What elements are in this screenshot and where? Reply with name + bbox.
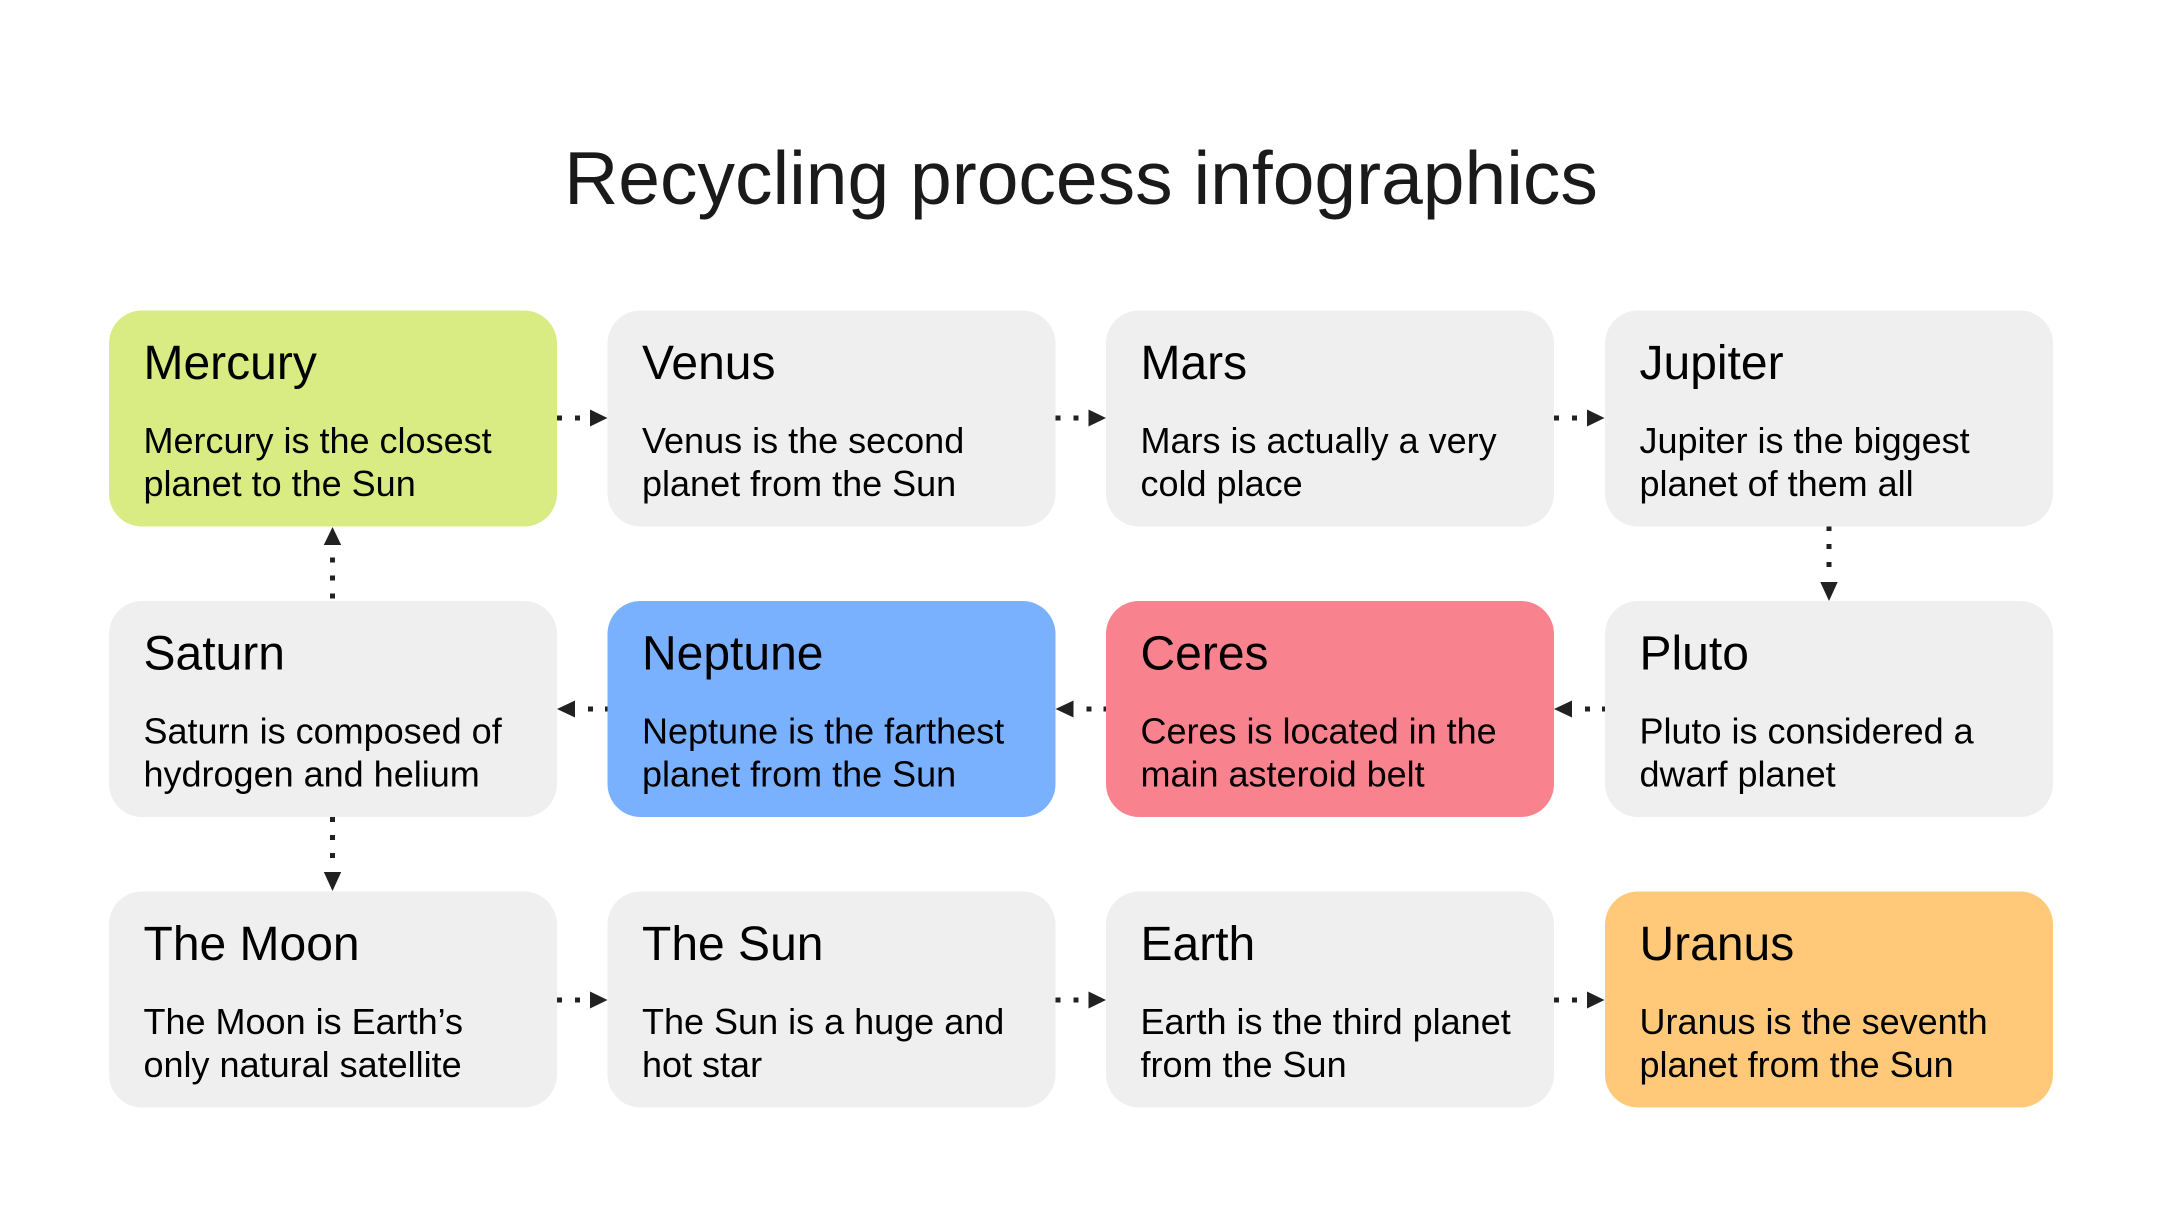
arrow: Jupiter to Pluto [1820, 526, 1838, 601]
panel: Ceres [1106, 601, 1554, 817]
panel: Mercury: planet to the Sun [144, 463, 416, 504]
panel: Neptune: Neptune is the farthest [642, 711, 1004, 752]
panel: Mars: Mars is actually a very [1140, 420, 1497, 461]
panel: Mars [1106, 310, 1554, 526]
arrow: Saturn to Mercury [324, 527, 341, 598]
panel: Mars: Mars [1140, 337, 1247, 390]
panel: Uranus [1605, 892, 2053, 1108]
panel: Venus [608, 310, 1056, 526]
panel: Saturn: Saturn [144, 627, 285, 680]
panel: Mercury: Mercury is the closest [144, 420, 492, 461]
panel: Mercury [109, 310, 557, 526]
arrow: Mercury to Venus [557, 410, 608, 426]
panel: Earth: Earth is the third planet [1140, 1001, 1511, 1042]
panel: The Moon: The Moon [144, 918, 360, 971]
panel: Pluto [1605, 601, 2053, 817]
panel: Earth: from the Sun [1140, 1044, 1347, 1085]
panel: The Sun: The Sun [642, 918, 823, 971]
panel: Earth: Earth [1140, 918, 1255, 971]
panel: The Sun [608, 892, 1056, 1108]
panel: Jupiter [1605, 310, 2053, 526]
panel: Pluto: Pluto is considered a [1640, 711, 1975, 752]
panel: The Moon: The Moon is Earth’s [144, 1001, 463, 1042]
arrow: Venus to Mars [1056, 410, 1106, 426]
panel: Jupiter: planet of them all [1640, 463, 1914, 504]
arrow: Ceres to Neptune [1056, 700, 1108, 718]
panel: The Sun: hot star [642, 1044, 762, 1085]
panel: The Sun: The Sun is a huge and [642, 1001, 1004, 1042]
panel: Venus: planet from the Sun [642, 463, 956, 504]
panel: Jupiter: Jupiter [1640, 337, 1784, 390]
panel: Uranus: planet from the Sun [1640, 1044, 1954, 1085]
panel: Venus: Venus is the second [642, 420, 964, 461]
arrow: Earth to Uranus [1554, 992, 1604, 1008]
arrow: The Sun to Earth [1056, 992, 1106, 1008]
panel: Ceres: Ceres is located in the [1140, 711, 1497, 752]
panel: Jupiter: Jupiter is the biggest [1640, 420, 1970, 461]
panel: Pluto: Pluto [1640, 627, 1749, 680]
title: Recycling process infographics [564, 136, 1598, 220]
panel: Mercury: Mercury [144, 337, 317, 390]
panel: Pluto: dwarf planet [1640, 754, 1836, 795]
panel: Uranus: Uranus [1640, 918, 1794, 971]
panel: Earth [1106, 892, 1554, 1108]
arrow: Mars to Jupiter [1554, 410, 1604, 426]
panel: Neptune: Neptune [642, 627, 823, 680]
panel: Ceres: Ceres [1140, 627, 1269, 680]
panel: Mars: cold place [1140, 463, 1303, 504]
arrow: Saturn to The Moon [324, 817, 341, 891]
panel: Uranus: Uranus is the seventh [1640, 1001, 1988, 1042]
panel: Saturn: hydrogen and helium [144, 754, 480, 795]
panel: The Moon [109, 892, 557, 1108]
panel: Venus: Venus [642, 337, 775, 390]
panel: Saturn [109, 601, 557, 817]
arrow: Pluto to Ceres [1554, 700, 1607, 718]
panel: Neptune: planet from the Sun [642, 754, 956, 795]
arrow: The Moon to The Sun [557, 992, 608, 1008]
panel: Saturn: Saturn is composed of [144, 711, 503, 752]
panel: Neptune [608, 601, 1056, 817]
arrow: Neptune to Saturn [557, 700, 610, 718]
panel: The Moon: only natural satellite [144, 1044, 462, 1085]
panel: Ceres: main asteroid belt [1140, 754, 1425, 795]
